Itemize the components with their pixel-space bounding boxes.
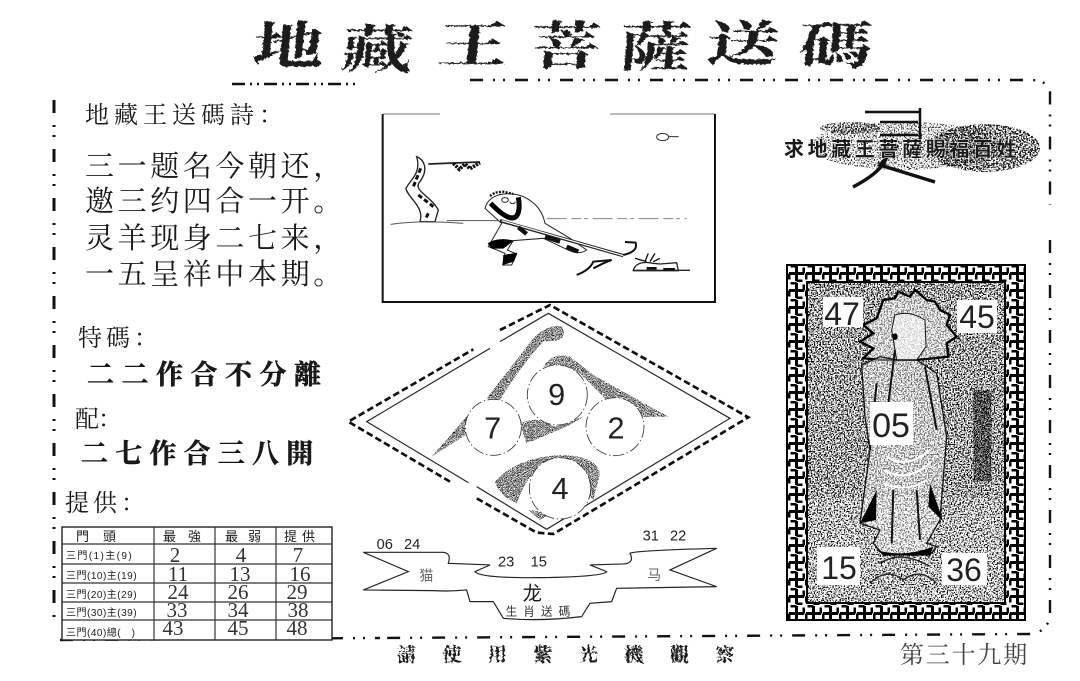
table row labels [66, 550, 137, 639]
card numbers [821, 296, 995, 588]
ultraviolet notice: 請使用紫光機觀察 [397, 643, 761, 666]
table row labels: 三門(20)主(29) [66, 589, 137, 601]
horizon line [391, 219, 687, 224]
ribbon labels: 猫 [419, 568, 433, 584]
circle numbers: 4 [551, 472, 569, 506]
title: 碼 [796, 18, 875, 75]
poem text: 三一题名今朝还， [85, 150, 346, 183]
table header: 最弱 [225, 529, 271, 544]
poem heading: 地藏王送碼詩： [85, 102, 288, 129]
table values: 34 [228, 598, 249, 622]
icon: bare tree [406, 157, 480, 222]
icon: rocks and grass [633, 253, 690, 271]
table values: 24 [168, 580, 189, 604]
diamond panel [348, 305, 748, 534]
ribbon labels: 生肖送碼 [506, 604, 576, 618]
issue number: 第三十九期 [900, 642, 1029, 669]
card numbers: 05 [872, 407, 910, 445]
icon: flag glyph [853, 108, 935, 187]
title: 藏 [339, 22, 416, 80]
cartoon panel [383, 114, 715, 302]
meander border [787, 265, 1025, 620]
table header: 提供 [284, 529, 320, 544]
title [250, 17, 875, 80]
card numbers: 15 [821, 550, 857, 586]
card numbers: 45 [959, 299, 995, 335]
table header [76, 529, 320, 544]
title: 地 [250, 18, 327, 76]
brush strokes [432, 326, 668, 520]
table values: 13 [230, 562, 250, 586]
table values: 4 [236, 543, 247, 567]
side inscription [973, 390, 992, 482]
poem text: 一五呈祥中本期。 [85, 258, 346, 291]
halo [860, 290, 957, 360]
ribbon numbers: 06 [377, 537, 393, 553]
ribbon labels: 马 [647, 567, 661, 583]
circle numbers [484, 378, 625, 506]
seal banner [784, 108, 1040, 187]
speckled ground [807, 282, 1005, 603]
card numbers: 36 [946, 552, 982, 588]
pairing heading: 配： [75, 406, 121, 433]
table values: 33 [166, 598, 188, 622]
table values: 11 [168, 562, 188, 586]
dashed outer frame [54, 80, 1050, 640]
poem text: 邀三约四合一开。 [85, 185, 346, 218]
circle numbers: 9 [548, 378, 565, 412]
table values: 7 [293, 543, 303, 567]
panel frame [383, 114, 715, 302]
title: 送 [704, 17, 784, 72]
robe folds [870, 350, 937, 543]
table header: 門頭 [76, 529, 130, 544]
ribbon numbers [377, 529, 686, 571]
title: 薩 [617, 19, 694, 78]
table values: 29 [286, 580, 308, 604]
table values: 2 [170, 543, 180, 567]
provider heading: 提供： [65, 490, 149, 517]
Buddha card [787, 265, 1025, 620]
robe shadows [860, 483, 943, 555]
pairing text: 二七作合三八開 [81, 439, 320, 469]
table values: 26 [228, 580, 248, 604]
title: 菩 [528, 19, 603, 76]
number circles [465, 365, 644, 519]
speckled oval [810, 122, 1040, 172]
table values: 48 [286, 616, 308, 640]
robed body [860, 357, 947, 555]
table values: 16 [290, 562, 310, 586]
zodiac ribbon [363, 529, 717, 620]
ribbon outline [363, 548, 717, 620]
poem text [85, 150, 346, 291]
ribbon numbers: 23 [498, 555, 514, 571]
table values: 38 [288, 598, 308, 622]
figure: worker with hoe [485, 192, 636, 265]
ribbon labels [419, 567, 661, 618]
table row labels: 三門(30)主(39) [66, 607, 137, 619]
number boxes [817, 297, 997, 585]
ribbon numbers: 31 [643, 529, 659, 545]
table values: 43 [162, 616, 184, 640]
number table [62, 527, 332, 640]
circle numbers: 7 [484, 411, 501, 445]
ribbon numbers: 22 [670, 529, 686, 545]
ribbon numbers: 15 [531, 555, 547, 571]
card numbers: 47 [824, 296, 860, 332]
special code text: 二二作合不分離 [87, 360, 328, 390]
table values [162, 543, 310, 640]
table row labels: 三門(10)主(19) [66, 570, 137, 582]
table values: 45 [228, 616, 248, 640]
head [892, 313, 926, 360]
ribbon numbers: 24 [404, 537, 420, 553]
table header: 最強 [163, 529, 213, 544]
lotus base [870, 557, 937, 583]
icon: weed [577, 260, 612, 275]
diamond frames [348, 305, 748, 534]
table row labels: 三門(1)主(9) [66, 550, 133, 562]
table row labels: 三門(40)總( ) [66, 626, 135, 639]
figure: standing Ksitigarbha [860, 290, 992, 583]
circle numbers: 2 [607, 411, 625, 445]
icon: small sun [657, 133, 679, 141]
ribbon labels: 龙 [523, 583, 542, 605]
poem text: 灵羊现身二七来， [85, 222, 346, 255]
banner text: 求地藏王菩薩賜福百姓 [784, 138, 1020, 161]
title: 王 [435, 19, 512, 73]
special code heading: 特碼： [78, 325, 162, 352]
